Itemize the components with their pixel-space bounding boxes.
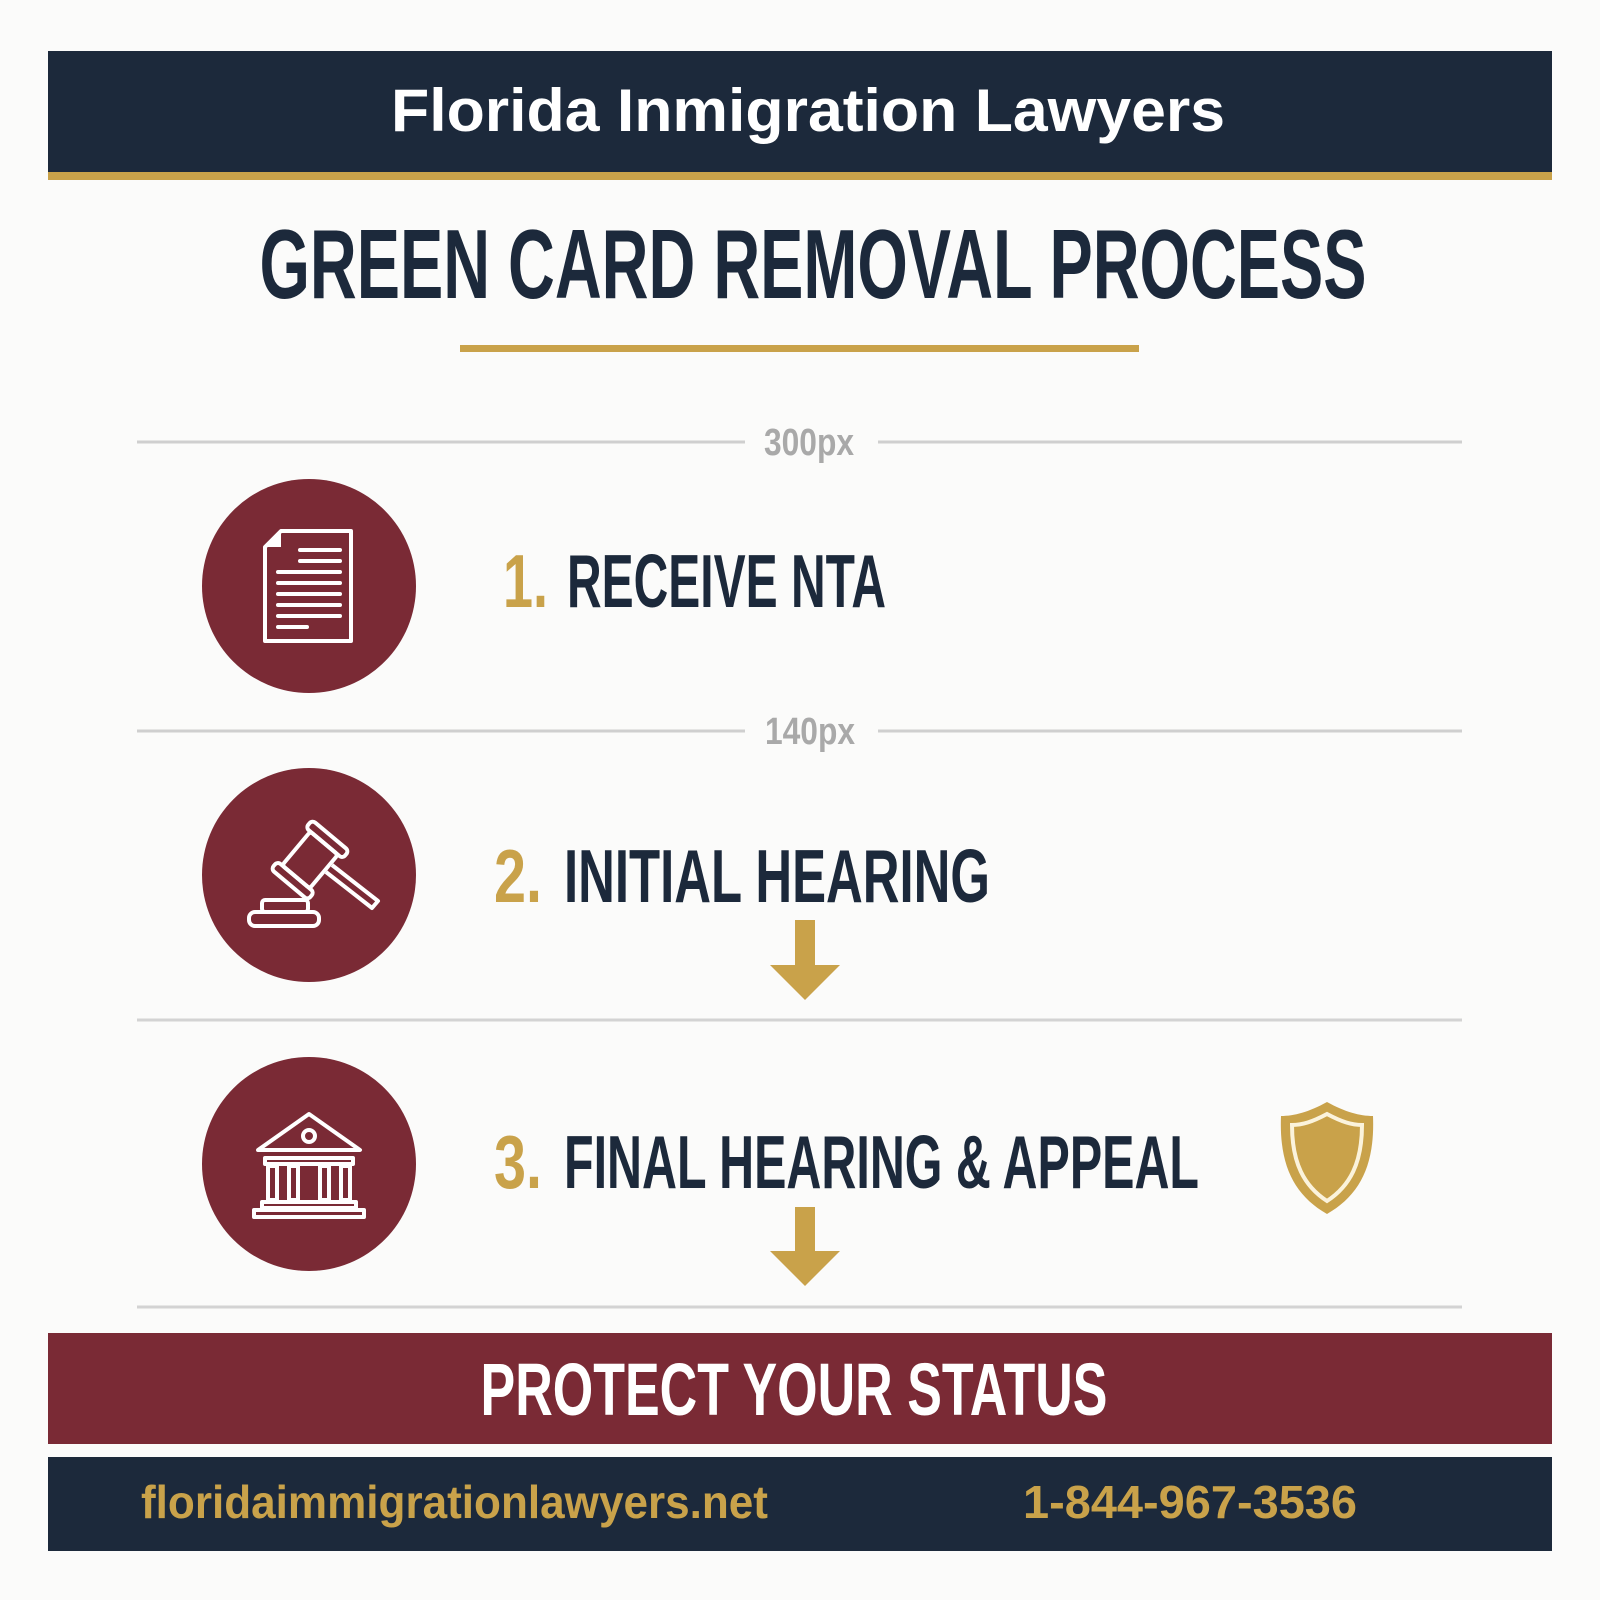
step 1 icon: document: [202, 479, 416, 693]
step 2 icon: gavel: [202, 768, 416, 982]
divider: [137, 1018, 1462, 1022]
step 2 label: 2.: [494, 834, 542, 918]
divider: [137, 1306, 1462, 1308]
step 1 label: 1.: [503, 539, 548, 623]
arrow down 1: [770, 920, 840, 1000]
banner: protect your status: PROTECT YOUR STATUS: [480, 1348, 1108, 1431]
step 2 label: INITIAL HEARING: [564, 834, 990, 918]
footer contact bar: 1-844-967-3536: [1023, 1476, 1357, 1528]
footer contact bar: [48, 1457, 1552, 1551]
icon: shield: [1281, 1102, 1373, 1214]
step 1 label: RECEIVE NTA: [567, 539, 886, 623]
arrow down 2: [770, 1207, 840, 1286]
step 1 label: [503, 539, 886, 623]
divider with label 140px: 140px: [765, 711, 855, 753]
header bar: [48, 51, 1552, 180]
banner: protect your status: [48, 1333, 1552, 1444]
footer contact bar: floridaimmigrationlawyers.net: [141, 1476, 768, 1528]
step 3 label: FINAL HEARING & APPEAL: [564, 1120, 1199, 1204]
step 3 label: [494, 1120, 1199, 1204]
divider with label 300px: 300px: [764, 422, 854, 464]
step 2 label: [494, 834, 990, 918]
step 3 label: 3.: [494, 1120, 542, 1204]
title underline: [460, 345, 1139, 352]
header bar: Florida Inmigration Lawyers: [391, 77, 1225, 144]
step 3 icon: courthouse: [202, 1057, 416, 1271]
